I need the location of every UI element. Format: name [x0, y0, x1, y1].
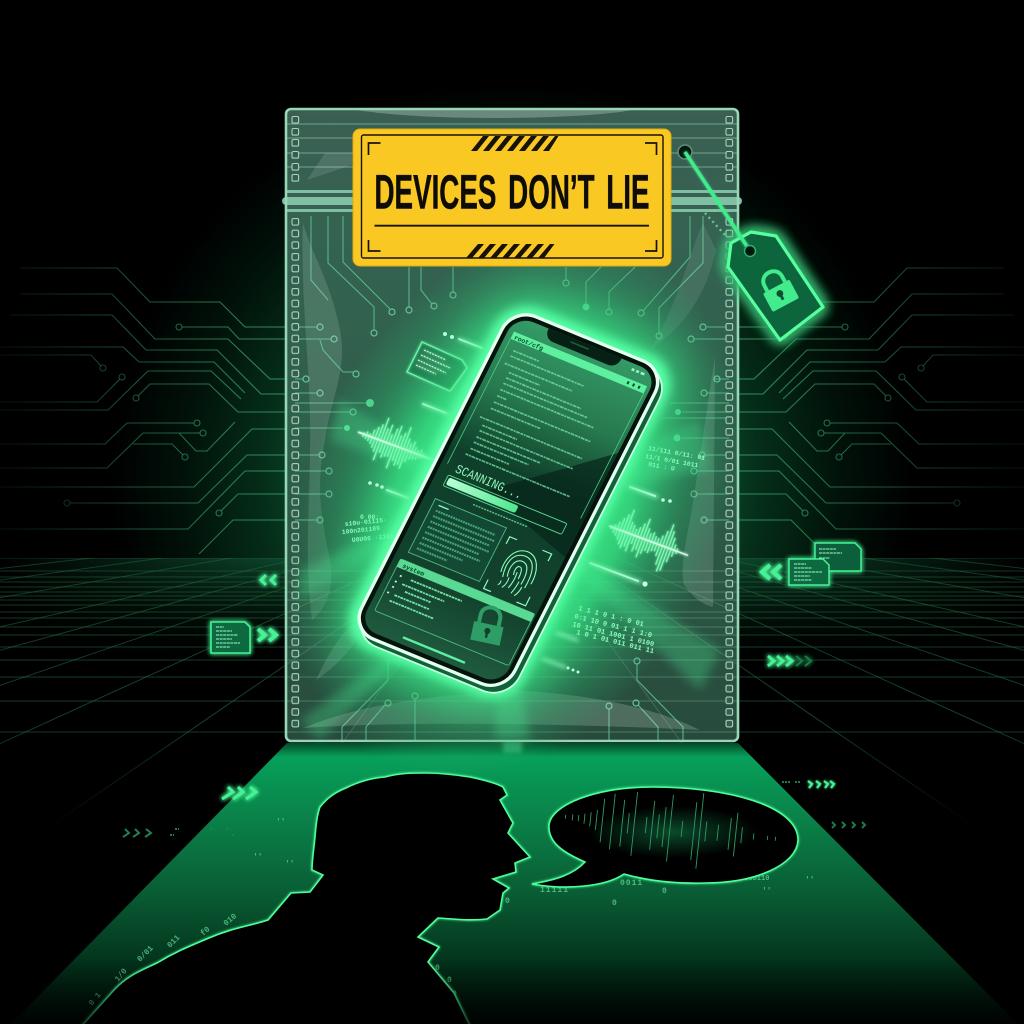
circuit traces left	[0, 268, 285, 554]
circuit traces in bag	[295, 216, 729, 741]
bottom fade	[0, 960, 1024, 1024]
binary specks on beam: ''	[762, 887, 772, 896]
fingerprint scanner	[484, 537, 552, 606]
binary specks on beam: 0011	[620, 879, 643, 888]
scanning label: SCANNING...	[453, 462, 525, 503]
chevrons right lower	[768, 656, 811, 666]
binary specks on beam: 010	[222, 912, 239, 928]
phone side edge	[351, 312, 671, 701]
title rule	[374, 225, 649, 227]
binary specks on beam	[87, 818, 815, 1008]
evidence tag	[685, 152, 823, 340]
faint marks right	[782, 782, 865, 828]
file icons right	[789, 543, 861, 585]
lower panel: system	[401, 563, 426, 578]
binary cloud left	[341, 514, 394, 544]
rays	[300, 400, 720, 740]
light beam floor	[5, 743, 1024, 1024]
binary specks on beam: 0	[662, 887, 667, 896]
bag outline	[286, 109, 738, 741]
chevrons left lower	[258, 629, 276, 641]
binary specks on beam: f0	[199, 925, 212, 938]
binary cloud left: U0U06 ·1101	[351, 533, 394, 544]
tag body	[728, 232, 823, 340]
binary cloud lower right: 0:1 10 0 01 1 1 1:0	[573, 613, 653, 640]
chevrons bottom left	[222, 787, 256, 799]
bag interior lines	[287, 110, 737, 740]
dark screen reflection	[472, 415, 618, 557]
binary specks on beam: ''	[253, 853, 263, 862]
bag holes lower left	[291, 218, 300, 729]
binary specks on beam: 0	[505, 897, 510, 906]
bag holes top left	[292, 116, 299, 181]
floating file icon	[407, 342, 467, 391]
binary cloud lower right: 10 11 01 1001 1 0100	[571, 621, 655, 649]
near phone glow	[346, 305, 673, 699]
header bar: root/cfg	[513, 334, 544, 352]
file icon left	[211, 622, 250, 653]
chevrons bottom right	[808, 781, 834, 788]
sign plate	[353, 129, 671, 266]
binary specks on beam: 0	[452, 990, 457, 999]
binary specks on beam: ''	[276, 818, 286, 827]
notch	[544, 329, 622, 368]
beam highlight	[503, 741, 522, 753]
code lines	[460, 350, 621, 497]
binary cloud left: 100n201189	[341, 525, 381, 536]
corner brackets	[368, 143, 656, 251]
binary specks on beam: 0	[612, 899, 617, 908]
binary cloud left: 0 00:	[360, 514, 379, 521]
tag dotted trail	[705, 213, 725, 235]
binary specks on beam: 0	[435, 964, 440, 973]
waveform right	[600, 503, 696, 580]
sign inner border	[362, 135, 663, 258]
bag hang hole	[678, 145, 692, 159]
hazard stripes bottom	[466, 244, 554, 258]
waveform left	[350, 409, 443, 483]
binary specks on beam: 0/01	[136, 944, 156, 964]
green projected light beam with silhouette	[0, 741, 1024, 1024]
binary cloud upper right	[645, 445, 706, 473]
binary cloud lower right: 1 1 1 0 1 : 0 01	[577, 605, 644, 629]
log panel	[408, 499, 506, 581]
evidence bag	[282, 108, 834, 826]
title: DEVICES DON’T LIE	[374, 166, 650, 220]
code frame	[447, 339, 644, 518]
bag body	[286, 109, 738, 741]
tag string	[685, 152, 750, 251]
phone	[344, 302, 674, 702]
lower panel	[375, 559, 535, 666]
speech bubble	[532, 779, 798, 887]
bag holes top right	[726, 116, 733, 181]
binary cloud left: s10u·01115·	[344, 517, 387, 528]
speaker	[571, 342, 589, 349]
binary specks on beam: 1/0	[113, 967, 130, 984]
floating data elements	[341, 332, 706, 674]
header bar	[510, 332, 647, 394]
binary specks on beam: 011	[166, 933, 182, 950]
hazard stripes top	[471, 136, 558, 151]
bubble waveform glow	[588, 806, 758, 858]
chevrons right upper	[762, 565, 781, 579]
circuit traces right	[739, 268, 1024, 554]
binary cloud upper right: 11/111 0/11: 01	[648, 445, 706, 462]
binary cloud upper right: 11/1 0/01 1011	[645, 453, 699, 469]
tag lock icon	[755, 266, 799, 312]
halo	[204, 156, 820, 854]
binary cloud lower right	[571, 605, 655, 656]
top band lines	[287, 124, 737, 167]
status icons	[632, 369, 644, 374]
binary specks on beam: 11111	[540, 886, 569, 895]
phone lock icon	[470, 605, 507, 646]
small chevrons and data marks	[123, 543, 865, 837]
bag holes lower right	[725, 218, 734, 729]
progress bar	[440, 475, 567, 540]
plastic wrinkles	[303, 109, 716, 730]
binary specks on beam: ''	[805, 876, 815, 885]
binary cloud lower right: 1 0 1 01 011 011 11	[575, 629, 655, 656]
screen	[359, 315, 658, 685]
dashes and dots	[368, 332, 672, 674]
chevrons left upper	[261, 575, 276, 585]
binary cloud upper right: 011 : U	[648, 461, 675, 473]
grid through bag	[287, 564, 737, 740]
faint chevrons and dots left	[123, 829, 235, 837]
binary specks on beam: 0100110	[740, 875, 769, 883]
binary specks on beam: 0 1	[87, 991, 104, 1008]
binary specks on beam: ''	[285, 860, 295, 869]
perspective floor grid	[0, 558, 1024, 814]
home indicator	[404, 638, 464, 662]
person silhouette	[78, 773, 530, 1024]
wide phone glow	[344, 302, 673, 701]
tag eyelet	[744, 246, 756, 256]
bubble waveform	[562, 779, 779, 877]
glow and rays around phone	[204, 156, 820, 854]
binary specks on beam: 0	[447, 976, 452, 985]
zip closure	[282, 190, 742, 212]
label sign	[353, 129, 671, 266]
phone body	[351, 307, 666, 693]
